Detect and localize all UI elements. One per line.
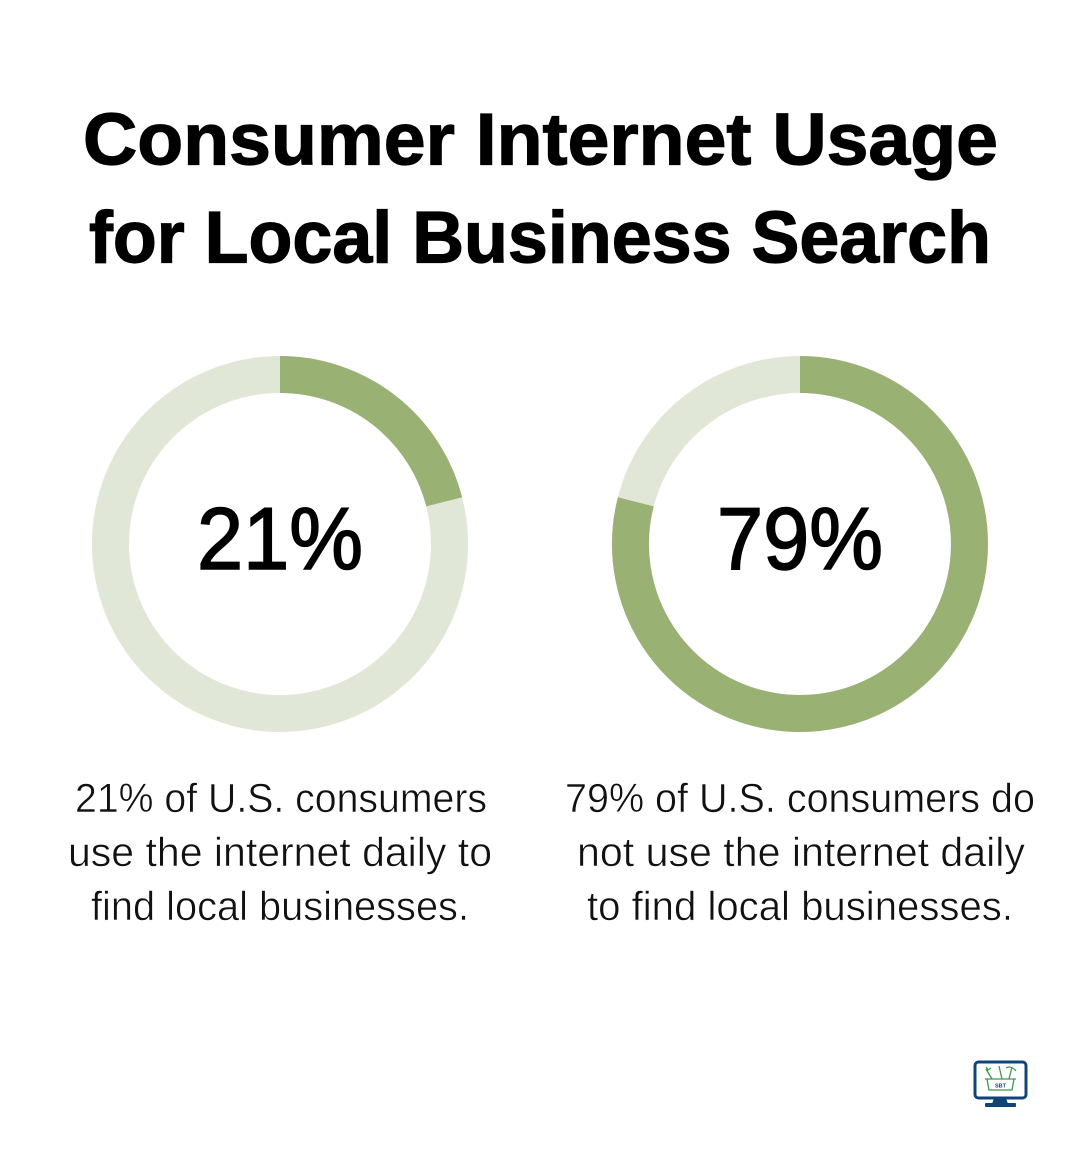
description: 21%: 21% of U.S. consumers <box>75 775 487 821</box>
donut chart: 21% <box>110 374 450 714</box>
icon: monitor with toolbox logo: SBT <box>995 1084 1007 1090</box>
description: 79% <box>565 775 1035 929</box>
panel: 21 percent statistic <box>68 374 492 929</box>
donut chart: 79% <box>630 374 970 714</box>
value: 21%: 21% <box>197 489 363 588</box>
description: 79%: 79% of U.S. consumers do <box>565 775 1035 821</box>
value: 79%: 79% <box>717 489 883 588</box>
description: 79%: not use the internet daily <box>577 829 1025 875</box>
description: 21% <box>68 775 492 929</box>
icon: monitor with toolbox logo <box>975 1062 1026 1107</box>
title <box>83 100 998 278</box>
title: for Local Business Search <box>89 198 991 278</box>
description: 79%: to find local businesses. <box>587 883 1013 929</box>
panel: 79 percent statistic <box>565 374 1035 929</box>
description: 21%: find local businesses. <box>91 883 469 929</box>
title: Consumer Internet Usage <box>83 100 998 180</box>
description: 21%: use the internet daily to <box>68 829 492 875</box>
